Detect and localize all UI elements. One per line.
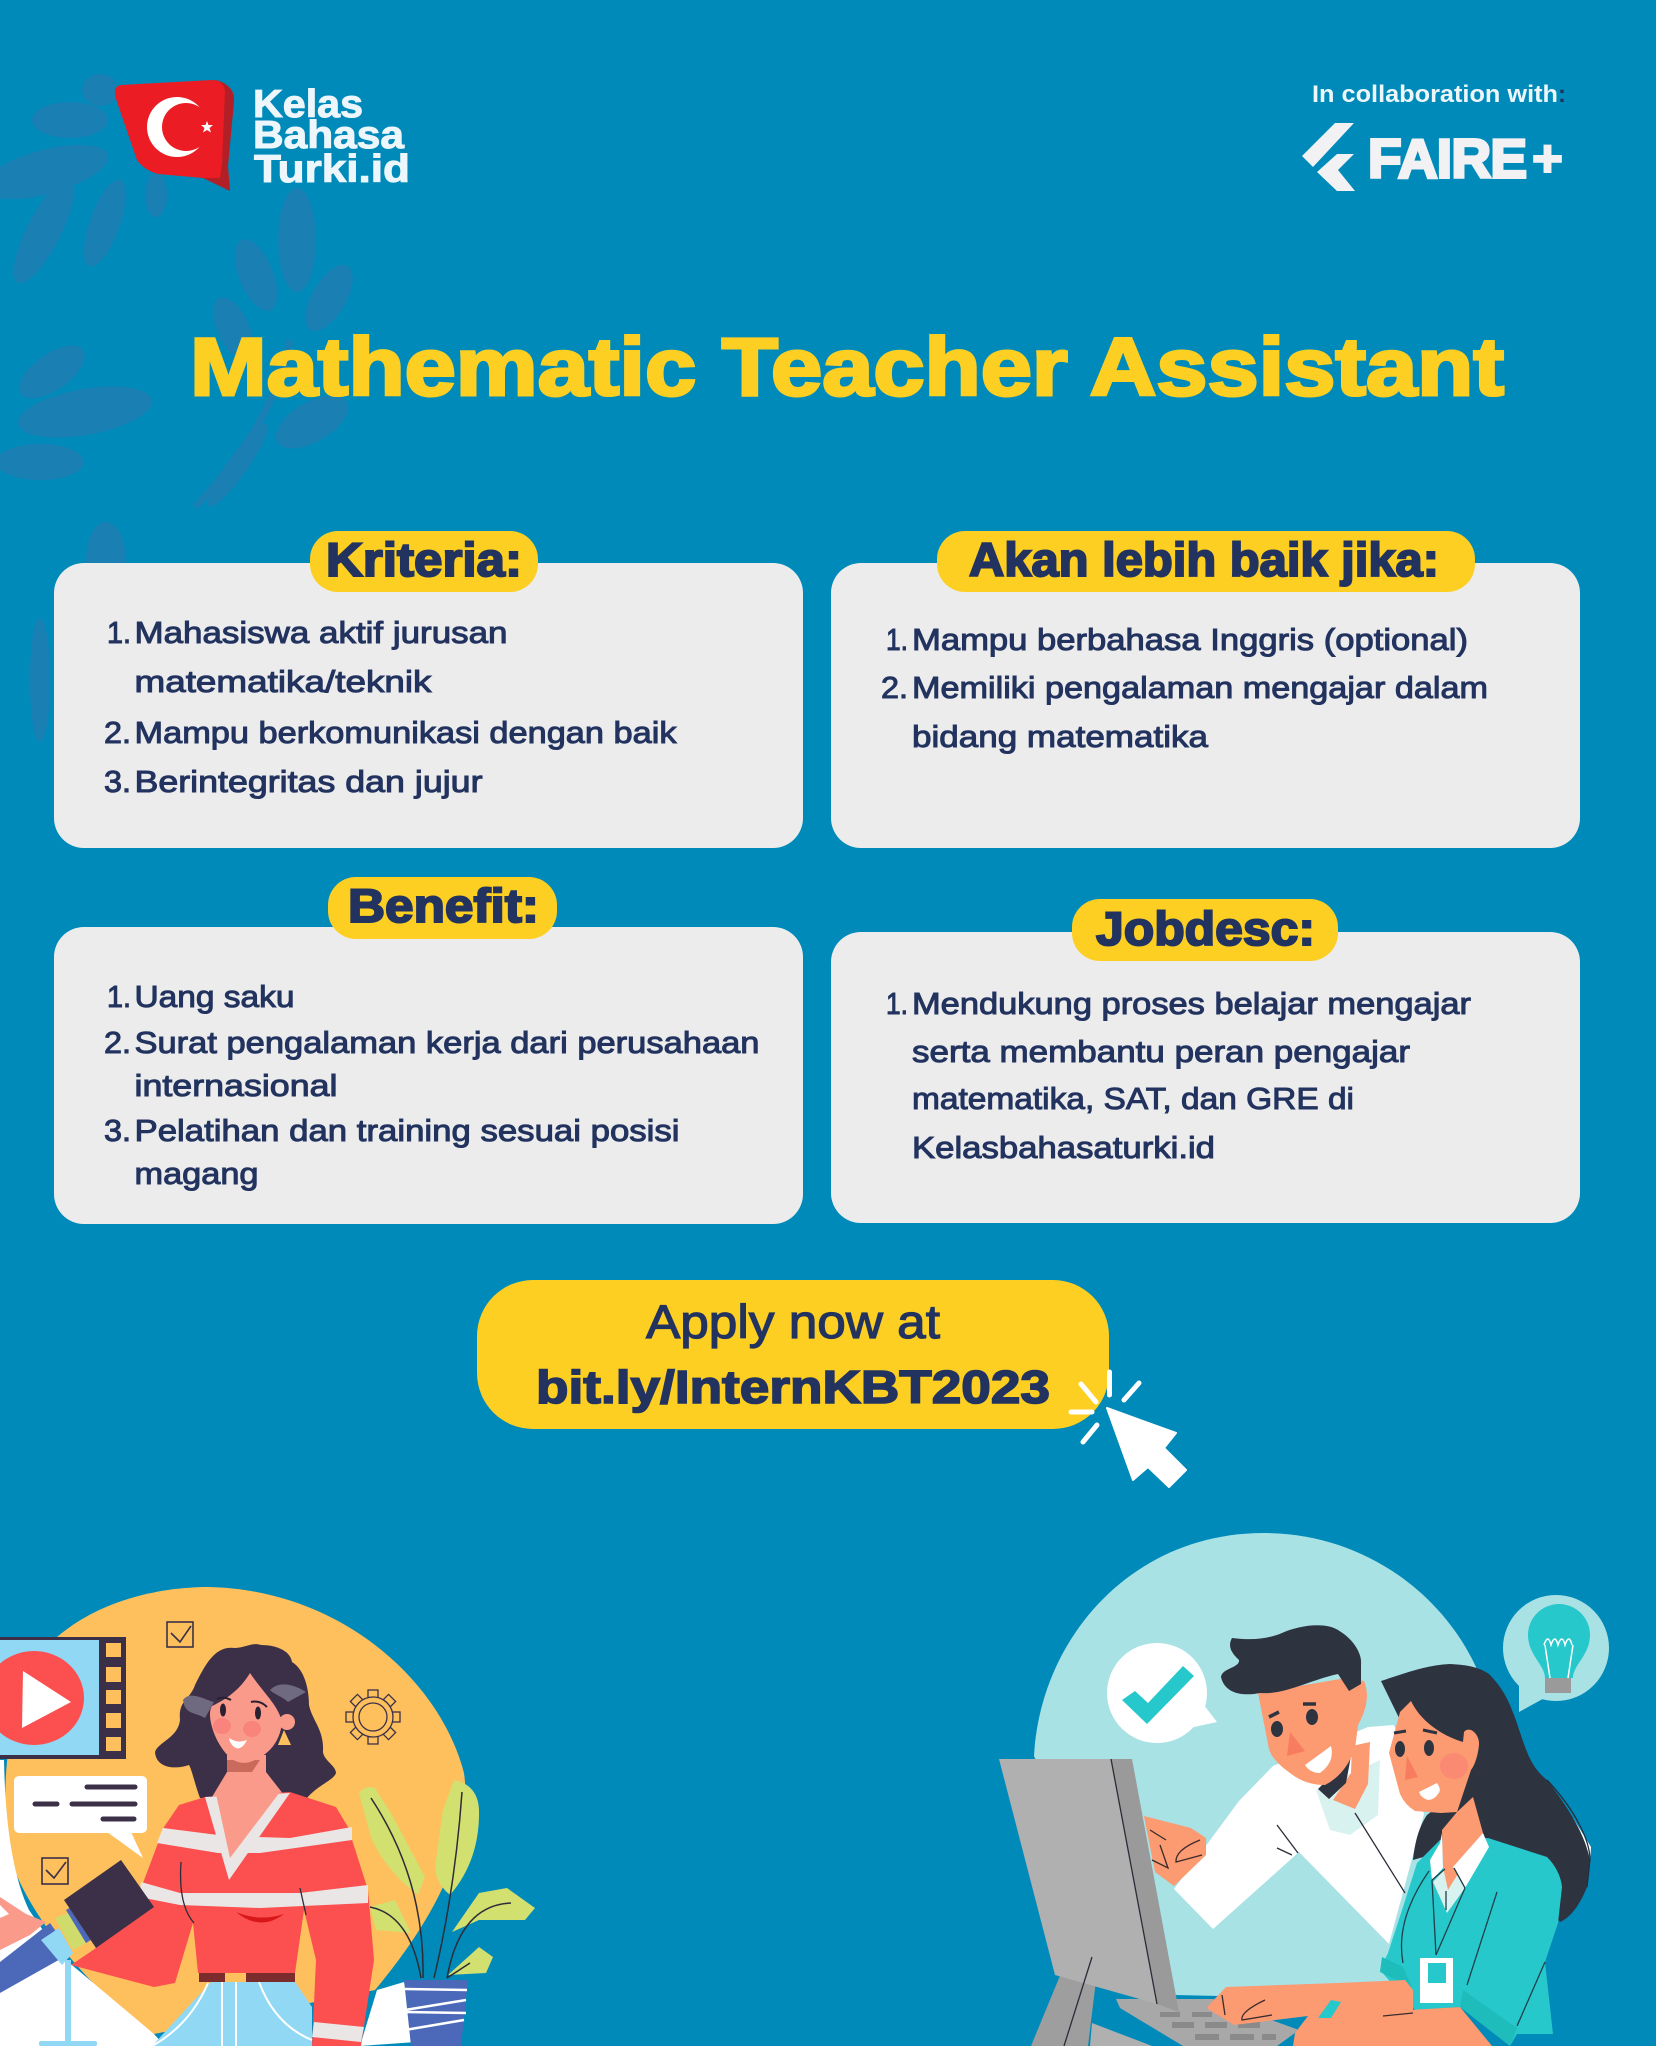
panel: Jobdesc	[831, 899, 1580, 1223]
person	[71, 1644, 374, 2046]
list: criteria: 1.	[107, 615, 131, 650]
panel: Benefit	[54, 877, 803, 1224]
collaboration text: :	[1558, 81, 1566, 108]
stand	[39, 1960, 97, 2046]
list: preferred: Mampu berbahasa Inggris (optional)	[912, 622, 1468, 657]
list: benefits	[104, 979, 760, 1191]
list: criteria: 3.	[104, 764, 131, 799]
list: benefits: 2.	[104, 1025, 131, 1060]
woman's arm and hand	[1208, 1980, 1492, 2046]
interviewer arm and book	[0, 1860, 154, 1993]
illustration: two people at a computer	[999, 1533, 1609, 2046]
panel: Akan lebih baik jika	[831, 531, 1580, 848]
pale teal blob	[1034, 1533, 1500, 2000]
logo: FAIRE+: +	[1532, 130, 1563, 188]
list: job description: matematika, SAT, dan GRE di	[912, 1081, 1354, 1116]
list: criteria: 2.	[104, 715, 131, 750]
list: job description: Mendukung proses belajar mengajar	[912, 986, 1471, 1021]
white stage shape	[0, 1760, 165, 2046]
video panel	[0, 1637, 126, 1759]
list: criteria	[104, 615, 677, 799]
list: benefits: 1.	[107, 979, 131, 1014]
list: criteria: Mampu berkomunikasi dengan baik	[134, 715, 677, 750]
list: benefits: internasional	[134, 1068, 338, 1103]
list: preferred: bidang matematika	[912, 719, 1209, 754]
list: job description: serta membantu peran pengajar	[912, 1034, 1410, 1069]
logo: Kelas Bahasa Turki.id: Bahasa	[253, 114, 404, 157]
list: benefits: Surat pengalaman kerja dari perusahaan	[134, 1025, 760, 1060]
panel: Kriteria	[54, 531, 803, 848]
heading: Benefit: Benefit:	[348, 879, 539, 932]
logo: FAIRE+	[1302, 123, 1563, 191]
heading: Jobdesc	[1072, 899, 1338, 961]
logo: Kelas Bahasa Turki.id: Kelas	[253, 83, 363, 126]
call to action button: Apply now at	[646, 1295, 940, 1348]
decorative background leaves	[0, 74, 362, 742]
gear icon	[346, 1690, 400, 1744]
heading: Benefit	[328, 877, 557, 939]
list: job description	[886, 986, 1471, 1165]
logo: FAIRE+: FAIRE	[1368, 128, 1527, 190]
list: job description: Kelasbahasaturki.id	[912, 1130, 1215, 1165]
logo: Kelas Bahasa Turki.id	[115, 80, 410, 191]
call to action button: bit.ly/InternKBT2023	[536, 1361, 1050, 1413]
light bulb bubble	[1503, 1595, 1609, 1712]
logo: Kelas Bahasa Turki.id: Turki.id	[254, 148, 410, 191]
heading: Kriteria: Kriteria:	[326, 533, 522, 586]
computer monitor	[999, 1759, 1299, 2046]
checkbox icons	[42, 1622, 193, 1884]
heading: Jobdesc: Jobdesc:	[1096, 902, 1315, 955]
list: benefits: magang	[134, 1156, 258, 1191]
list: preferred: 2.	[881, 670, 908, 705]
heading: Akan lebih baik jika: Akan lebih baik jika:	[969, 533, 1439, 586]
call to action button	[477, 1280, 1109, 1429]
list: benefits: 3.	[104, 1113, 131, 1148]
yellow background blob	[5, 1587, 466, 2034]
list: preferred: 1.	[886, 622, 908, 657]
illustration: woman presenter	[0, 1587, 535, 2046]
icon: cursor click	[1071, 1372, 1186, 1487]
plant	[359, 1780, 535, 2046]
list: benefits: Pelatihan dan training sesuai posisi	[134, 1113, 680, 1148]
list: criteria: Berintegritas dan jujur	[134, 764, 482, 799]
man	[1144, 1625, 1424, 1944]
list: criteria: Mahasiswa aktif jurusan	[134, 615, 508, 650]
list: preferred	[881, 622, 1488, 754]
speech bubble	[14, 1776, 147, 1858]
list: preferred: Memiliki pengalaman mengajar dalam	[912, 670, 1488, 705]
list: criteria: matematika/teknik	[134, 664, 432, 699]
title: Mathematic Teacher Assistant	[190, 322, 1504, 413]
list: benefits: Uang saku	[134, 979, 294, 1014]
list: job description: 1.	[886, 986, 908, 1021]
heading: Kriteria	[310, 531, 538, 592]
collaboration text: In collaboration with	[1312, 81, 1558, 108]
check speech bubble	[1107, 1643, 1217, 1743]
woman	[1380, 1664, 1591, 2046]
